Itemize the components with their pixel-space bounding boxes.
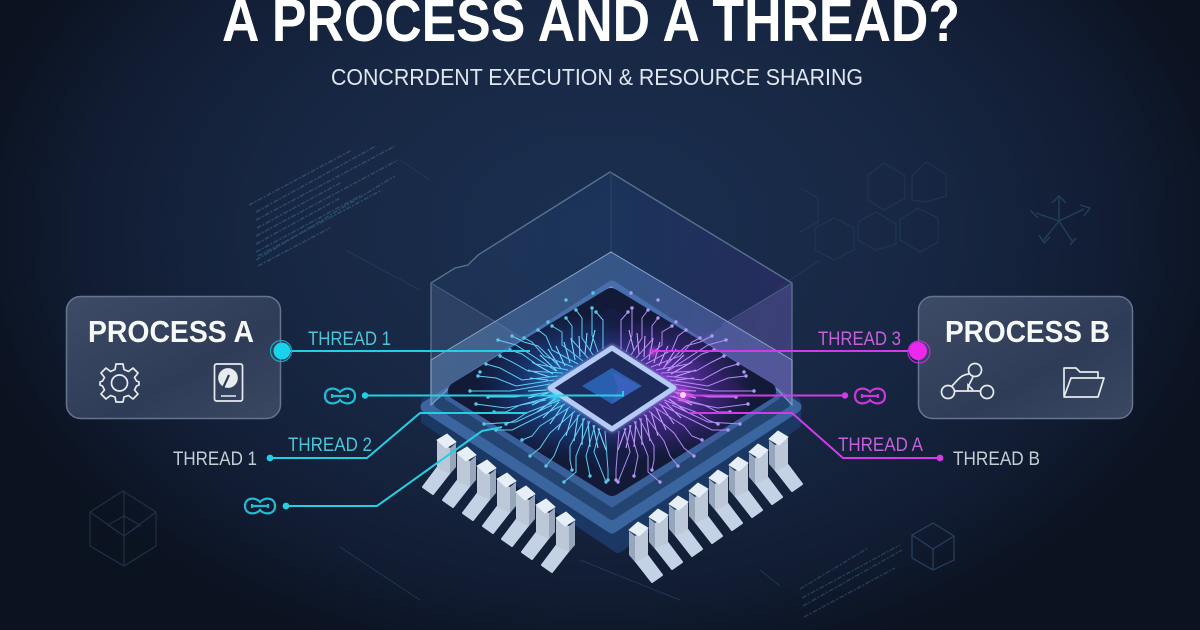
- icon: cyan link upper: [325, 389, 355, 403]
- glow right: [570, 317, 754, 457]
- icon: gear: [100, 364, 139, 402]
- circuit traces, cyan side: [470, 293, 608, 482]
- chip pins, left row: [423, 434, 575, 572]
- circuit traces, purple side: [616, 293, 754, 482]
- icon: magenta link: [855, 389, 885, 403]
- node: magenta thread endpoint: [908, 341, 930, 363]
- connector: link line left: [365, 391, 623, 396]
- decorative hexagons, upper right: [800, 162, 946, 260]
- decorative star network, upper right: [1030, 196, 1090, 245]
- outer glass enclosure: [431, 172, 792, 405]
- chip assembly: [423, 172, 802, 582]
- connector: lower link line left: [286, 427, 502, 506]
- decorative wireframe cube, lower right: [912, 523, 954, 570]
- chip package substrate: [426, 286, 796, 548]
- connector: thread A right: [690, 413, 940, 458]
- label: thread 1 cyan: THREAD 1: [308, 328, 391, 350]
- label: thread A magenta: THREAD A: [838, 434, 923, 456]
- connector: link line right: [684, 394, 845, 396]
- silicon die: [457, 297, 767, 487]
- connector: thread 1 left: [270, 351, 623, 506]
- node: cyan thread endpoint: [270, 340, 292, 362]
- chip pins, right row: [629, 431, 802, 582]
- decorative code lines, lower right: [800, 545, 902, 617]
- decorative wireframe cube, lower left: [90, 491, 156, 566]
- subtitle: CONCRRDENT EXECUTION & RESOURCE SHARING: [331, 64, 863, 90]
- label: thread 3 magenta: THREAD 3: [818, 328, 901, 350]
- icon: node graph: [942, 364, 994, 398]
- connector: thread 2 left: [270, 413, 527, 458]
- decorative code lines, upper left: [249, 146, 398, 266]
- label: thread 1 white: THREAD 1: [173, 448, 257, 470]
- connector end dots: [267, 392, 943, 509]
- glowing spots on the core: [550, 348, 690, 402]
- label: thread B white: THREAD B: [953, 448, 1040, 470]
- central processor core: [547, 345, 677, 432]
- label: thread 2 cyan: THREAD 2: [288, 434, 372, 456]
- icon: hard disk: [214, 364, 242, 401]
- connector: thread 3 right: [652, 351, 940, 458]
- heading: process A: PROCESS A: [88, 314, 254, 349]
- icon: cyan link lower: [245, 499, 275, 513]
- panel: process B: [918, 296, 1132, 418]
- glow left: [477, 315, 667, 459]
- heading: process B: PROCESS B: [945, 314, 1110, 349]
- panel: process A: [66, 296, 280, 418]
- icon: folder: [1064, 368, 1104, 397]
- glass lid band: [431, 252, 792, 405]
- decorative network lines: [340, 160, 820, 600]
